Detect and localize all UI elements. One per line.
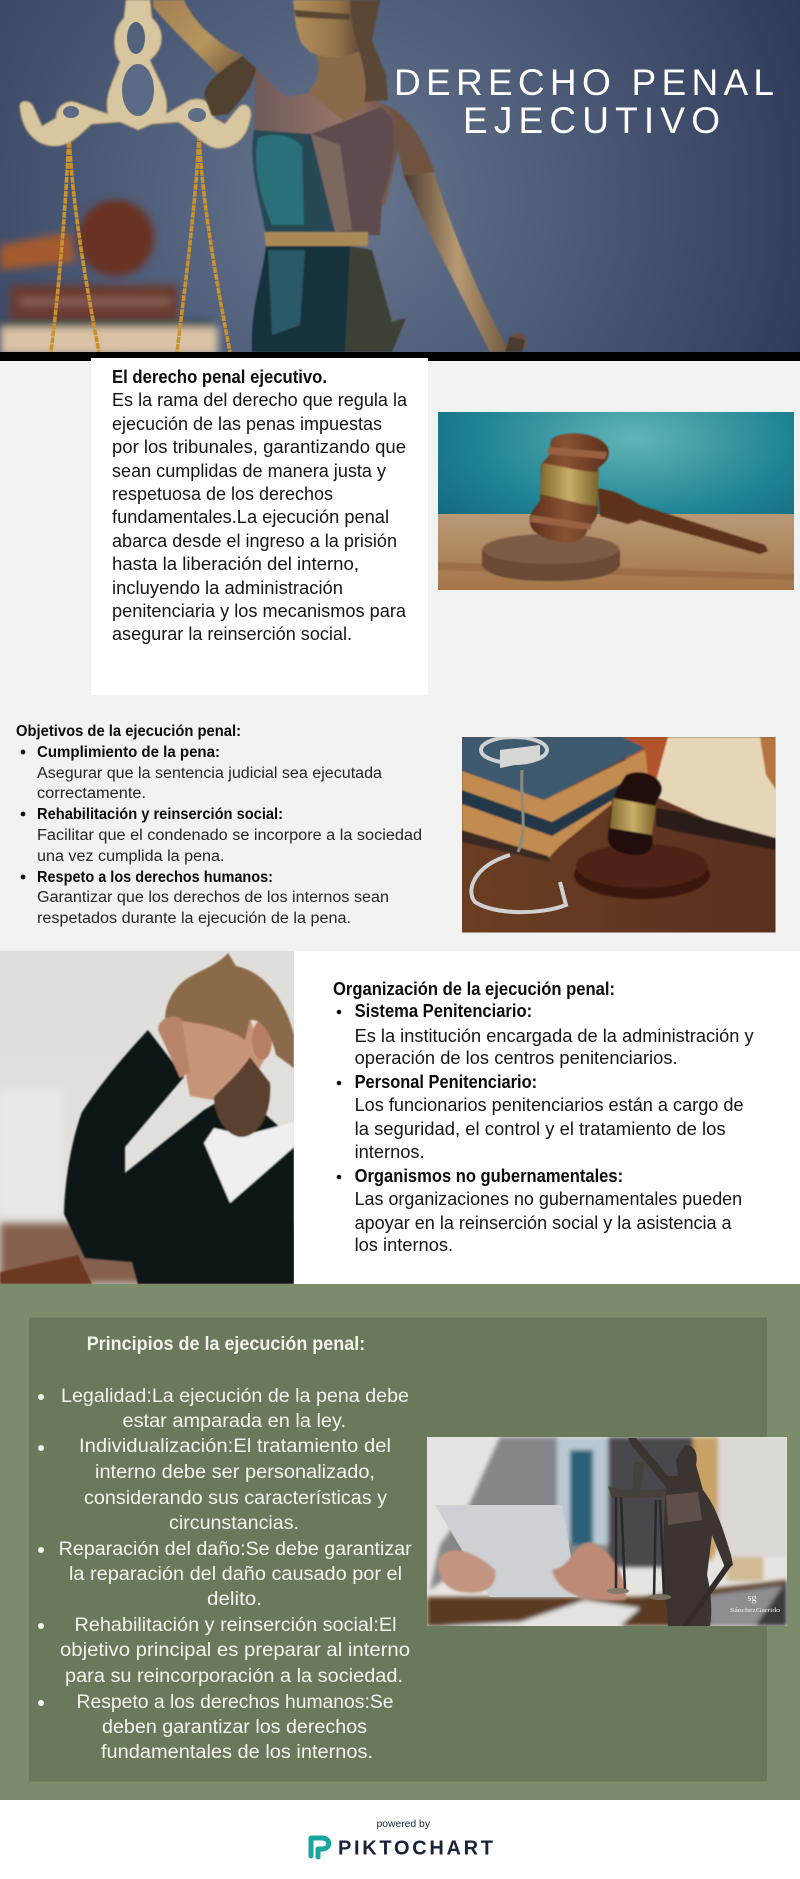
list: objectives: una vez cumplida la pena. — [37, 848, 225, 865]
gavel base — [574, 851, 710, 899]
statuette — [607, 1438, 733, 1626]
definition paragraph: Es la rama del derecho que regula la — [112, 390, 408, 410]
list: principles: objetivo principal es preparar al interno — [60, 1640, 410, 1661]
list: organization: internos. — [355, 1142, 425, 1162]
list: organization: Los funcionarios penitenciarios están a cargo de — [355, 1095, 744, 1115]
sleeve drape — [204, 56, 256, 116]
list: objectives: Rehabilitación y reinserción social: — [37, 806, 283, 823]
definition paragraph: ejecución de las penas impuestas — [112, 414, 382, 434]
definition paragraph: incluyendo la administración — [112, 578, 343, 598]
hero photo: statue of justice — [0, 0, 800, 352]
panel: definition card — [91, 358, 428, 695]
list: principles: Respeto a los derechos humanos:Se — [76, 1692, 394, 1713]
list: organization: Personal Penitenciario: — [355, 1072, 537, 1092]
list: organization — [337, 1001, 754, 1255]
list: principles — [38, 1386, 412, 1763]
scale beam — [20, 0, 251, 148]
scale chains — [51, 135, 230, 352]
photo: books, gavel and handcuffs — [462, 737, 776, 932]
ear — [252, 1020, 272, 1060]
heading: principles: Principios de la ejecución penal: — [87, 1334, 365, 1355]
list: principles: para su reincorporación a la sociedad. — [65, 1666, 403, 1687]
list: principles: deben garantizar los derechos — [102, 1717, 367, 1738]
photo: pensive man — [0, 951, 294, 1284]
panel: light grey section — [0, 361, 800, 951]
powered by label: powered by — [376, 1818, 431, 1830]
hair — [350, 0, 388, 102]
title: EJECUTIVO — [463, 100, 720, 141]
definition paragraph: por los tribunales, garantizando que — [112, 437, 406, 457]
list: principles: Legalidad:La ejecución de la pena debe — [61, 1386, 409, 1407]
definition paragraph — [112, 390, 408, 644]
definition paragraph: penitenciaria y los mecanismos para — [112, 601, 407, 621]
right upper arm — [385, 108, 434, 178]
list: principles: interno debe ser personalizado, — [95, 1462, 375, 1483]
footer: Piktochart branding — [311, 1818, 493, 1860]
panel: principles — [0, 1284, 800, 1800]
base — [482, 550, 620, 581]
panel: objectives — [16, 723, 422, 927]
heading: definition: El derecho penal ejecutivo. — [112, 367, 327, 387]
list: principles: fundamentales de los internos. — [101, 1742, 373, 1763]
list: organization: Organismos no gubernamentales: — [355, 1166, 623, 1186]
hands — [438, 1550, 495, 1593]
handcuffs — [471, 737, 566, 912]
book stack — [462, 750, 648, 859]
black divider bar — [0, 352, 800, 361]
list: objectives: correctamente. — [37, 785, 146, 802]
list: organization: operación de los centros penitenciarios. — [355, 1048, 678, 1068]
handle — [598, 488, 768, 554]
sleeve and torso — [64, 1030, 294, 1284]
shirt — [204, 1122, 294, 1203]
piktochart wordmark: PIKTOCHART — [338, 1838, 493, 1860]
dress upper — [252, 130, 380, 235]
photo: lawyer reading with justice statuette — [427, 1437, 787, 1626]
list: objectives: Respeto a los derechos humanos: — [37, 869, 273, 886]
list: objectives: Facilitar que el condenado se incorpore a la sociedad — [37, 827, 422, 844]
title — [394, 62, 774, 141]
list: objectives — [21, 744, 422, 927]
card background — [91, 358, 428, 695]
list: principles: Rehabilitación y reinserción social:El — [74, 1615, 396, 1636]
list: principles: Reparación del daño:Se debe garantizar — [59, 1539, 412, 1560]
icon: piktochart logo — [311, 1838, 329, 1857]
heading: objectives: Objetivos de la ejecución penal: — [16, 723, 241, 740]
document — [435, 1505, 578, 1597]
list: organization: Es la institución encargada de la administración y — [355, 1026, 754, 1046]
face — [176, 1018, 264, 1100]
panel: hero banner — [0, 0, 800, 361]
list: organization: la seguridad, el control y el tratamiento de los — [355, 1119, 726, 1139]
list: objectives: Garantizar que los derechos de los internos sean — [37, 889, 389, 906]
photo: wooden gavel on teal background — [438, 412, 794, 590]
lower dress — [252, 246, 352, 352]
definition paragraph: respetuosa de los derechos — [112, 484, 333, 504]
title: DERECHO PENAL — [394, 62, 774, 103]
watermark: sg — [748, 1593, 756, 1604]
chest — [254, 68, 400, 205]
hand — [158, 1016, 190, 1078]
green background — [0, 1284, 800, 1800]
panel: organization — [0, 951, 754, 1284]
beard — [214, 1057, 270, 1137]
list: organization: Las organizaciones no gubernamentales pueden — [355, 1189, 742, 1209]
heading: organization: Organización de la ejecución penal: — [333, 979, 615, 999]
list: principles: estar amparada en la ley. — [122, 1411, 346, 1432]
gavel handle — [656, 808, 776, 850]
list: organization: Sistema Penitenciario: — [355, 1001, 532, 1021]
right forearm — [404, 172, 510, 352]
list: principles: Individualización:El tratamiento del — [79, 1436, 391, 1457]
list: organization: los internos. — [355, 1235, 453, 1255]
neck — [308, 52, 372, 122]
gavel head — [530, 433, 609, 542]
gavel head — [608, 772, 662, 855]
watermark — [730, 1593, 780, 1614]
definition paragraph: fundamentales.La ejecución penal — [112, 507, 389, 527]
list: principles: circunstancias. — [169, 1513, 299, 1534]
hair — [165, 953, 294, 1068]
list: principles: la reparación del daño causado por el — [69, 1564, 402, 1585]
definition paragraph: hasta la liberación del interno, — [112, 554, 359, 574]
belt — [264, 232, 368, 246]
raised arm — [153, 0, 242, 82]
list: objectives: respetados durante la ejecución de la pena. — [37, 910, 351, 927]
definition paragraph: sean cumplidas de manera justa y — [112, 461, 386, 481]
face — [293, 0, 368, 57]
inner panel — [29, 1318, 767, 1782]
list: objectives: Cumplimiento de la pena: — [37, 744, 220, 761]
list: principles: considerando sus características y — [84, 1488, 388, 1509]
definition paragraph: abarca desde el ingreso a la prisión — [112, 531, 397, 551]
definition paragraph: asegurar la reinserción social. — [112, 624, 352, 644]
list: principles: delito. — [207, 1589, 262, 1610]
watermark: SánchezGarrido — [730, 1607, 780, 1614]
list: objectives: Asegurar que la sentencia judicial sea ejecutada — [37, 765, 382, 782]
list: organization: apoyar en la reinserción social y la asistencia a — [355, 1213, 733, 1233]
